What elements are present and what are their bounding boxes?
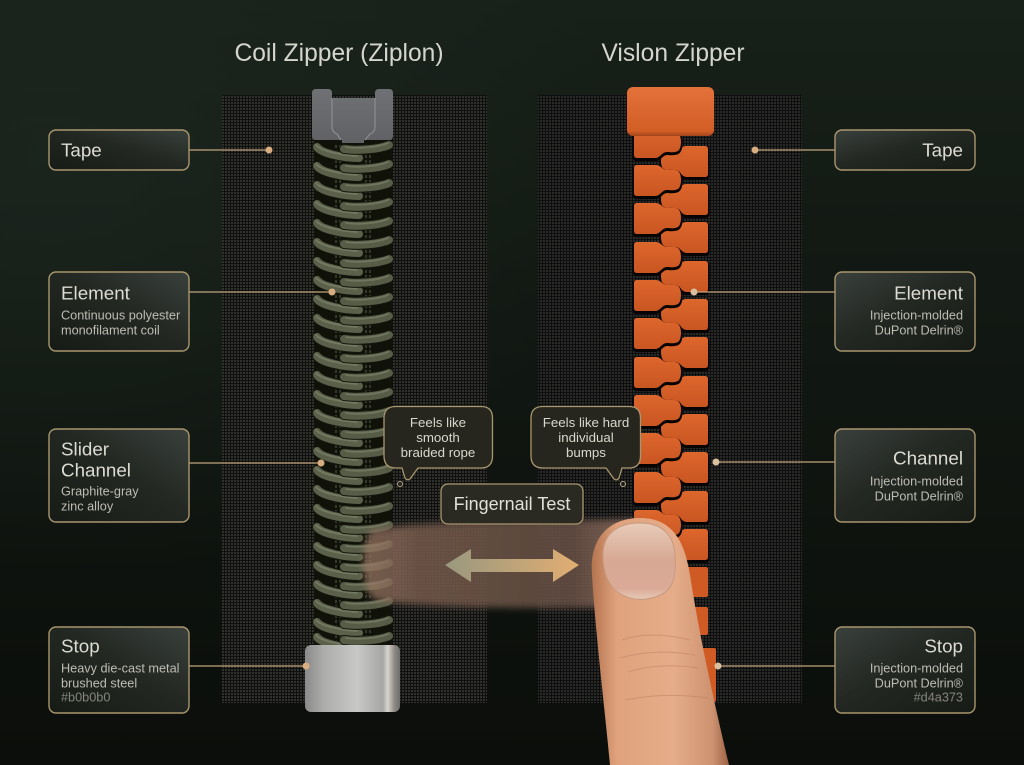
- orange top stop: [627, 87, 714, 136]
- finger with nail: [592, 518, 729, 765]
- label: stop left: Stop: [61, 636, 100, 656]
- label: tape left: [49, 130, 272, 170]
- arrow: fingernail motion: [445, 549, 579, 582]
- panel: coil zipper tape: [222, 95, 487, 703]
- label: tape right: [752, 130, 975, 170]
- label: element right: DuPont Delrin®: [875, 324, 964, 338]
- label: stop left: #b0b0b0: [61, 690, 110, 704]
- callout: vislon feel: individual: [558, 430, 614, 445]
- label: element right: Element: [894, 282, 964, 304]
- label: fingernail test: Fingernail Test: [454, 494, 570, 514]
- label: tape left: Tape: [61, 140, 102, 160]
- label: stop right: Injection-molded: [870, 662, 963, 676]
- label: tape right: Tape: [922, 140, 963, 160]
- callout: vislon feel: bumps: [566, 445, 606, 460]
- label: stop right: DuPont Delrin®: [875, 676, 964, 690]
- label: fingernail test: [441, 484, 583, 524]
- label: channel right: [712, 429, 975, 522]
- icon: graphite slider: [312, 89, 393, 143]
- fingernail: [603, 523, 675, 599]
- coil zipper assembly: [305, 89, 400, 712]
- label: slider channel left: Slider: [61, 438, 109, 460]
- callout: vislon feel: [531, 406, 640, 486]
- title: coil zipper: Coil Zipper (Ziplon): [234, 40, 444, 67]
- blurred finger motion: [363, 519, 640, 608]
- callout: coil feel: Feels like: [410, 415, 466, 430]
- label: element right: Injection-molded: [870, 308, 963, 322]
- title: vislon zipper: Vislon Zipper: [601, 40, 745, 67]
- label: stop right: [714, 627, 975, 713]
- callout: coil feel: smooth: [416, 430, 460, 445]
- label: slider channel left: [49, 429, 324, 522]
- label: slider channel left: zinc alloy: [61, 500, 114, 514]
- callout: coil feel: braided rope: [401, 445, 475, 460]
- icon: brushed steel stop: [305, 645, 400, 712]
- label: stop left: Heavy die-cast metal: [61, 662, 179, 676]
- coil element: [316, 143, 389, 648]
- label: stop left: [49, 627, 310, 713]
- label: element left: Element: [61, 282, 131, 304]
- label: slider channel left: Channel: [61, 460, 131, 480]
- callout: coil feel: [384, 406, 492, 486]
- panel: vislon zipper tape: [538, 95, 802, 703]
- label: stop right: #d4a373: [914, 690, 963, 704]
- label: channel right: Injection-molded: [870, 474, 963, 488]
- label: element left: monofilament coil: [61, 324, 160, 338]
- label: channel right: Channel: [893, 448, 963, 468]
- orange bottom stop: [690, 648, 716, 702]
- label: stop right: Stop: [924, 636, 963, 656]
- label: element right: [690, 272, 975, 351]
- callout: vislon feel: Feels like hard: [543, 415, 629, 430]
- label: element left: [49, 272, 336, 351]
- vislon zipper assembly: [627, 87, 716, 702]
- label: stop left: brushed steel: [61, 676, 137, 690]
- label: element left: Continuous polyester: [61, 308, 181, 322]
- label: slider channel left: Graphite-gray: [61, 484, 139, 498]
- label: channel right: DuPont Delrin®: [875, 490, 964, 504]
